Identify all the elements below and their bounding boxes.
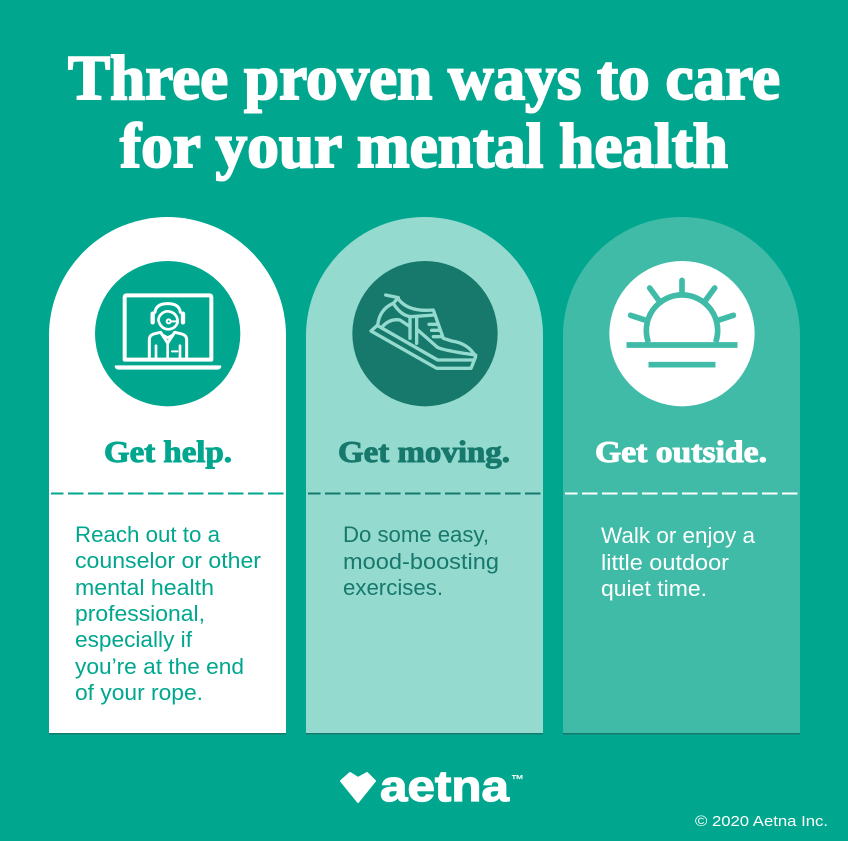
- text: get outside body: quiet time.: [601, 576, 707, 601]
- heading: get moving: Get moving.: [338, 434, 510, 469]
- panel: get help: [49, 217, 286, 734]
- text: get moving body: exercises.: [343, 575, 443, 600]
- heading: get outside: Get outside.: [595, 434, 767, 469]
- copyright: © 2020 Aetna Inc.: [695, 813, 828, 830]
- icon: counselor on laptop: [95, 261, 240, 406]
- icon: heart: [341, 773, 375, 802]
- logo: aetna: ™: [511, 772, 524, 787]
- text: get outside body: Walk or enjoy a: [601, 523, 756, 548]
- text: get moving body: [343, 522, 499, 600]
- logo: aetna: [341, 762, 524, 811]
- title: for your mental health: [120, 111, 728, 181]
- text: get help body: especially if: [75, 627, 193, 652]
- icon: sunrise: [609, 261, 755, 406]
- text: get help body: counselor or other: [75, 548, 261, 573]
- panel: get moving: [306, 217, 543, 734]
- text: get moving body: Do some easy,: [343, 522, 489, 547]
- text: get moving body: mood-boosting: [343, 549, 499, 574]
- icon: running shoe: [352, 261, 498, 406]
- heading: get help: Get help.: [104, 434, 232, 469]
- text: get help body: you’re at the end: [75, 654, 244, 679]
- panel: get outside: [563, 217, 800, 734]
- text: get outside body: [601, 523, 756, 601]
- text: get help body: Reach out to a: [75, 522, 221, 547]
- text: get help body: of your rope.: [75, 680, 203, 705]
- title: [68, 43, 780, 181]
- text: get help body: professional,: [75, 601, 205, 626]
- text: get help body: [75, 522, 261, 705]
- text: get outside body: little outdoor: [601, 550, 729, 575]
- title: Three proven ways to care: [68, 43, 780, 113]
- logo: aetna: aetna: [380, 762, 510, 811]
- text: get help body: mental health: [75, 575, 214, 600]
